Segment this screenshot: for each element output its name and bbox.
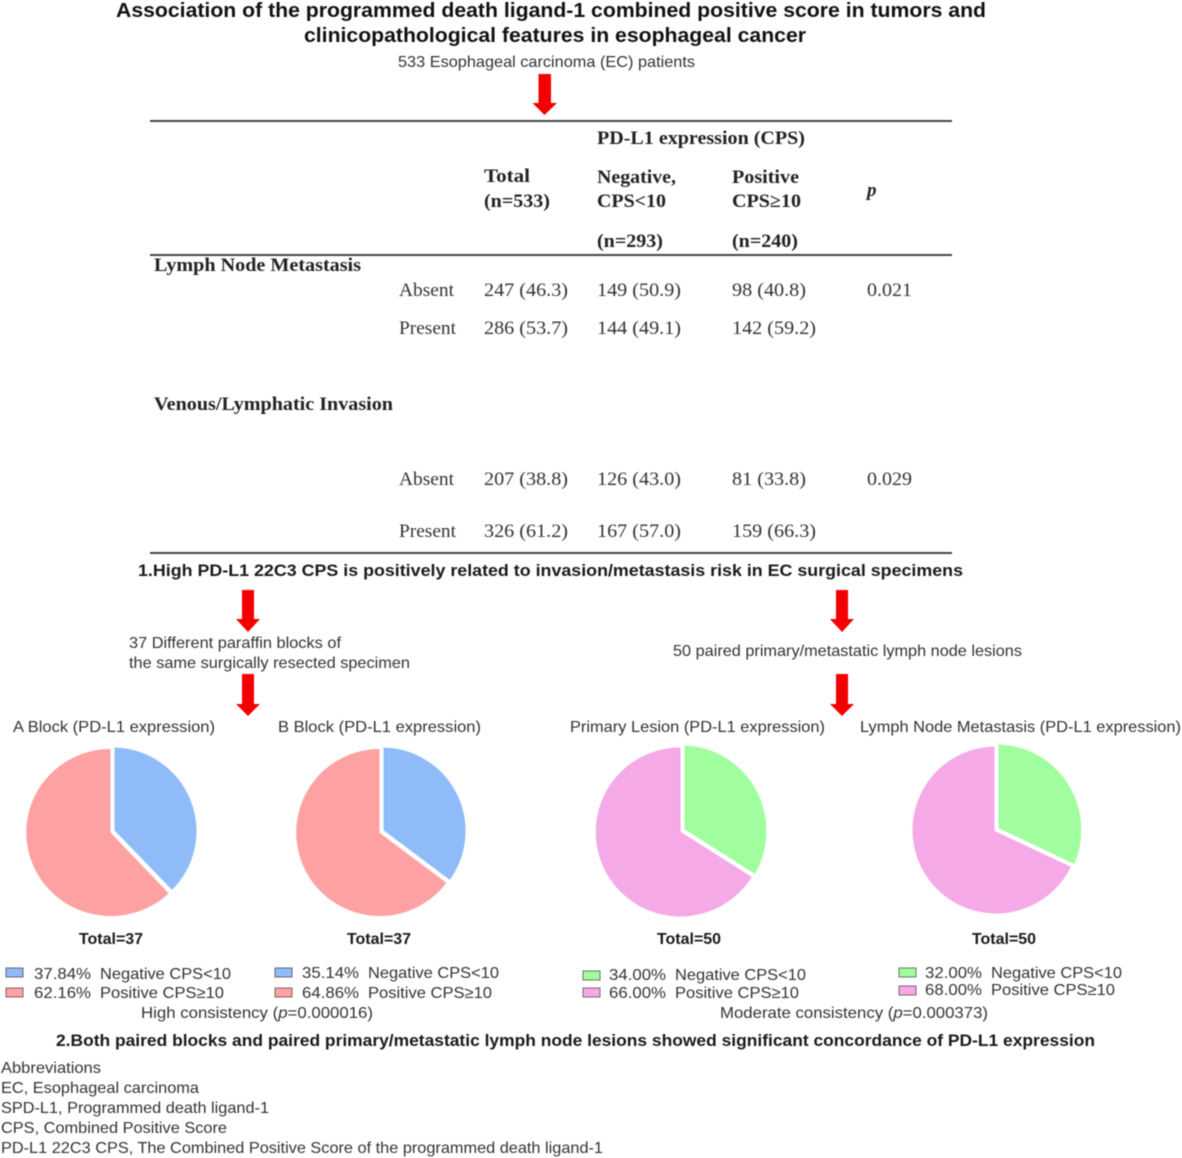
chart: primary lesion pie: Total=50: [657, 931, 721, 948]
high consistency note: High consistency ( p=0.000016): [141, 1005, 373, 1022]
arrow: right branch upper: [830, 590, 854, 632]
table section: venous/lymphatic invasion: 167 (57.0): [597, 521, 681, 542]
table header: p: [865, 180, 876, 201]
legend: A block: 62.16%: [34, 985, 91, 1002]
legend: B block: 64.86%: [302, 985, 359, 1002]
abbreviations: Abbreviations: [1, 1060, 101, 1077]
table header: Positive: [732, 167, 799, 188]
left branch label: [129, 635, 410, 672]
table header: Total: [484, 166, 530, 187]
table section: venous/lymphatic invasion: 159 (66.3): [732, 521, 816, 542]
table section: lymph node metastasis: 144 (49.1): [597, 318, 681, 339]
table section: lymph node metastasis: 142 (59.2): [732, 318, 816, 339]
chart: A block pie: Total=37: [79, 931, 143, 948]
table header: (n=293): [597, 231, 663, 252]
table section: venous/lymphatic invasion: Absent: [399, 469, 455, 490]
legend: primary lesion: Positive CPS≥10: [675, 985, 799, 1002]
abbreviations: EC, Esophageal carcinoma: [1, 1080, 199, 1097]
title: Association of the programmed death ligand-1 combined positive score in tumors and: [116, 0, 986, 22]
legend: lymph node metastasis: [899, 965, 1122, 999]
legend: lymph node metastasis: Positive CPS≥10: [991, 982, 1115, 999]
legend: A block: Negative CPS<10: [100, 966, 231, 983]
chart: A block pie: [13, 719, 215, 948]
chart: lymph node metastasis pie: Lymph Node Metastasis (PD-L1 expression): [860, 719, 1181, 736]
table section: venous/lymphatic invasion: Venous/Lymphatic Invasion: [154, 394, 393, 415]
legend: primary lesion: 66.00%: [609, 985, 666, 1002]
table section: venous/lymphatic invasion: Present: [399, 521, 457, 542]
chart: lymph node metastasis pie: Total=50: [972, 931, 1036, 948]
title: [116, 0, 986, 47]
table section: venous/lymphatic invasion: 81 (33.8): [732, 469, 806, 490]
table header: (n=533): [484, 191, 550, 212]
legend: lymph node metastasis: 68.00%: [925, 982, 982, 999]
right branch label: 50 paired primary/metastatic lymph node lesions: [673, 643, 1022, 660]
arrow: left branch upper: [236, 590, 260, 632]
chart: B block pie: [278, 719, 481, 948]
legend: A block: [6, 966, 231, 1002]
table section: venous/lymphatic invasion: [154, 394, 912, 542]
table section: lymph node metastasis: Present: [399, 318, 457, 339]
legend: B block: [275, 965, 499, 1002]
table: PD-L1 expression and features: [150, 120, 952, 554]
table header: CPS≥10: [732, 191, 801, 212]
table section: venous/lymphatic invasion: 126 (43.0): [597, 469, 681, 490]
legend: A block: Positive CPS≥10: [100, 985, 224, 1002]
table section: venous/lymphatic invasion: 0.029: [867, 469, 912, 490]
legend: lymph node metastasis: Negative CPS<10: [991, 965, 1122, 982]
table header: PD-L1 expression (CPS): [597, 128, 805, 149]
chart: primary lesion pie: Primary Lesion (PD-L1 expression): [570, 719, 825, 736]
legend: primary lesion: [583, 967, 806, 1002]
table section: lymph node metastasis: [154, 255, 912, 339]
moderate consistency note: Moderate consistency ( p=0.000373): [720, 1005, 988, 1022]
table header: [484, 128, 876, 252]
table section: lymph node metastasis: Lymph Node Metastasis: [154, 255, 361, 276]
legend: B block: Positive CPS≥10: [368, 985, 492, 1002]
chart: primary lesion pie: [570, 719, 825, 948]
cohort label: 533 Esophageal carcinoma (EC) patients: [398, 54, 695, 71]
table section: lymph node metastasis: 149 (50.9): [597, 280, 681, 301]
table section: lymph node metastasis: 247 (46.3): [484, 280, 568, 301]
legend: B block: Negative CPS<10: [368, 965, 499, 982]
chart: B block pie: B Block (PD-L1 expression): [278, 719, 481, 736]
legend: primary lesion: Negative CPS<10: [675, 967, 806, 984]
chart: A block pie: A Block (PD-L1 expression): [13, 719, 215, 736]
left branch label: 37 Different paraffin blocks of: [129, 635, 342, 652]
table section: lymph node metastasis: 98 (40.8): [732, 280, 806, 301]
legend: A block: 37.84%: [34, 966, 91, 983]
table section: lymph node metastasis: Absent: [399, 280, 455, 301]
finding 2 heading: 2.Both paired blocks and paired primary/metastatic lymph node lesions showed significant concordance of PD-L1 expression: [56, 1031, 1095, 1050]
title: clinicopathological features in esophageal cancer: [304, 25, 806, 47]
arrow: cohort to table: [532, 74, 557, 115]
table section: lymph node metastasis: 0.021: [867, 280, 912, 301]
legend: lymph node metastasis: 32.00%: [925, 965, 982, 982]
arrow: left branch lower: [236, 674, 260, 716]
table header: Negative,: [597, 167, 676, 188]
table section: venous/lymphatic invasion: 207 (38.8): [484, 469, 568, 490]
table section: venous/lymphatic invasion: 326 (61.2): [484, 521, 568, 542]
left branch label: the same surgically resected specimen: [129, 655, 410, 672]
table header: CPS<10: [597, 191, 666, 212]
abbreviations: PD-L1 22C3 CPS, The Combined Positive Score of the programmed death ligand-1: [1, 1140, 603, 1157]
finding 1 heading: 1.High PD-L1 22C3 CPS is positively related to invasion/metastasis risk in EC surgical specimens: [138, 561, 963, 580]
chart: B block pie: Total=37: [347, 931, 411, 948]
legend: B block: 35.14%: [302, 965, 359, 982]
arrow: right branch lower: [830, 674, 854, 716]
abbreviations: [1, 1060, 603, 1157]
abbreviations: SPD-L1, Programmed death ligand-1: [1, 1100, 269, 1117]
table section: lymph node metastasis: 286 (53.7): [484, 318, 568, 339]
chart: lymph node metastasis pie: [860, 719, 1181, 948]
abbreviations: CPS, Combined Positive Score: [1, 1120, 227, 1137]
table header: (n=240): [732, 231, 798, 252]
legend: primary lesion: 34.00%: [609, 967, 666, 984]
